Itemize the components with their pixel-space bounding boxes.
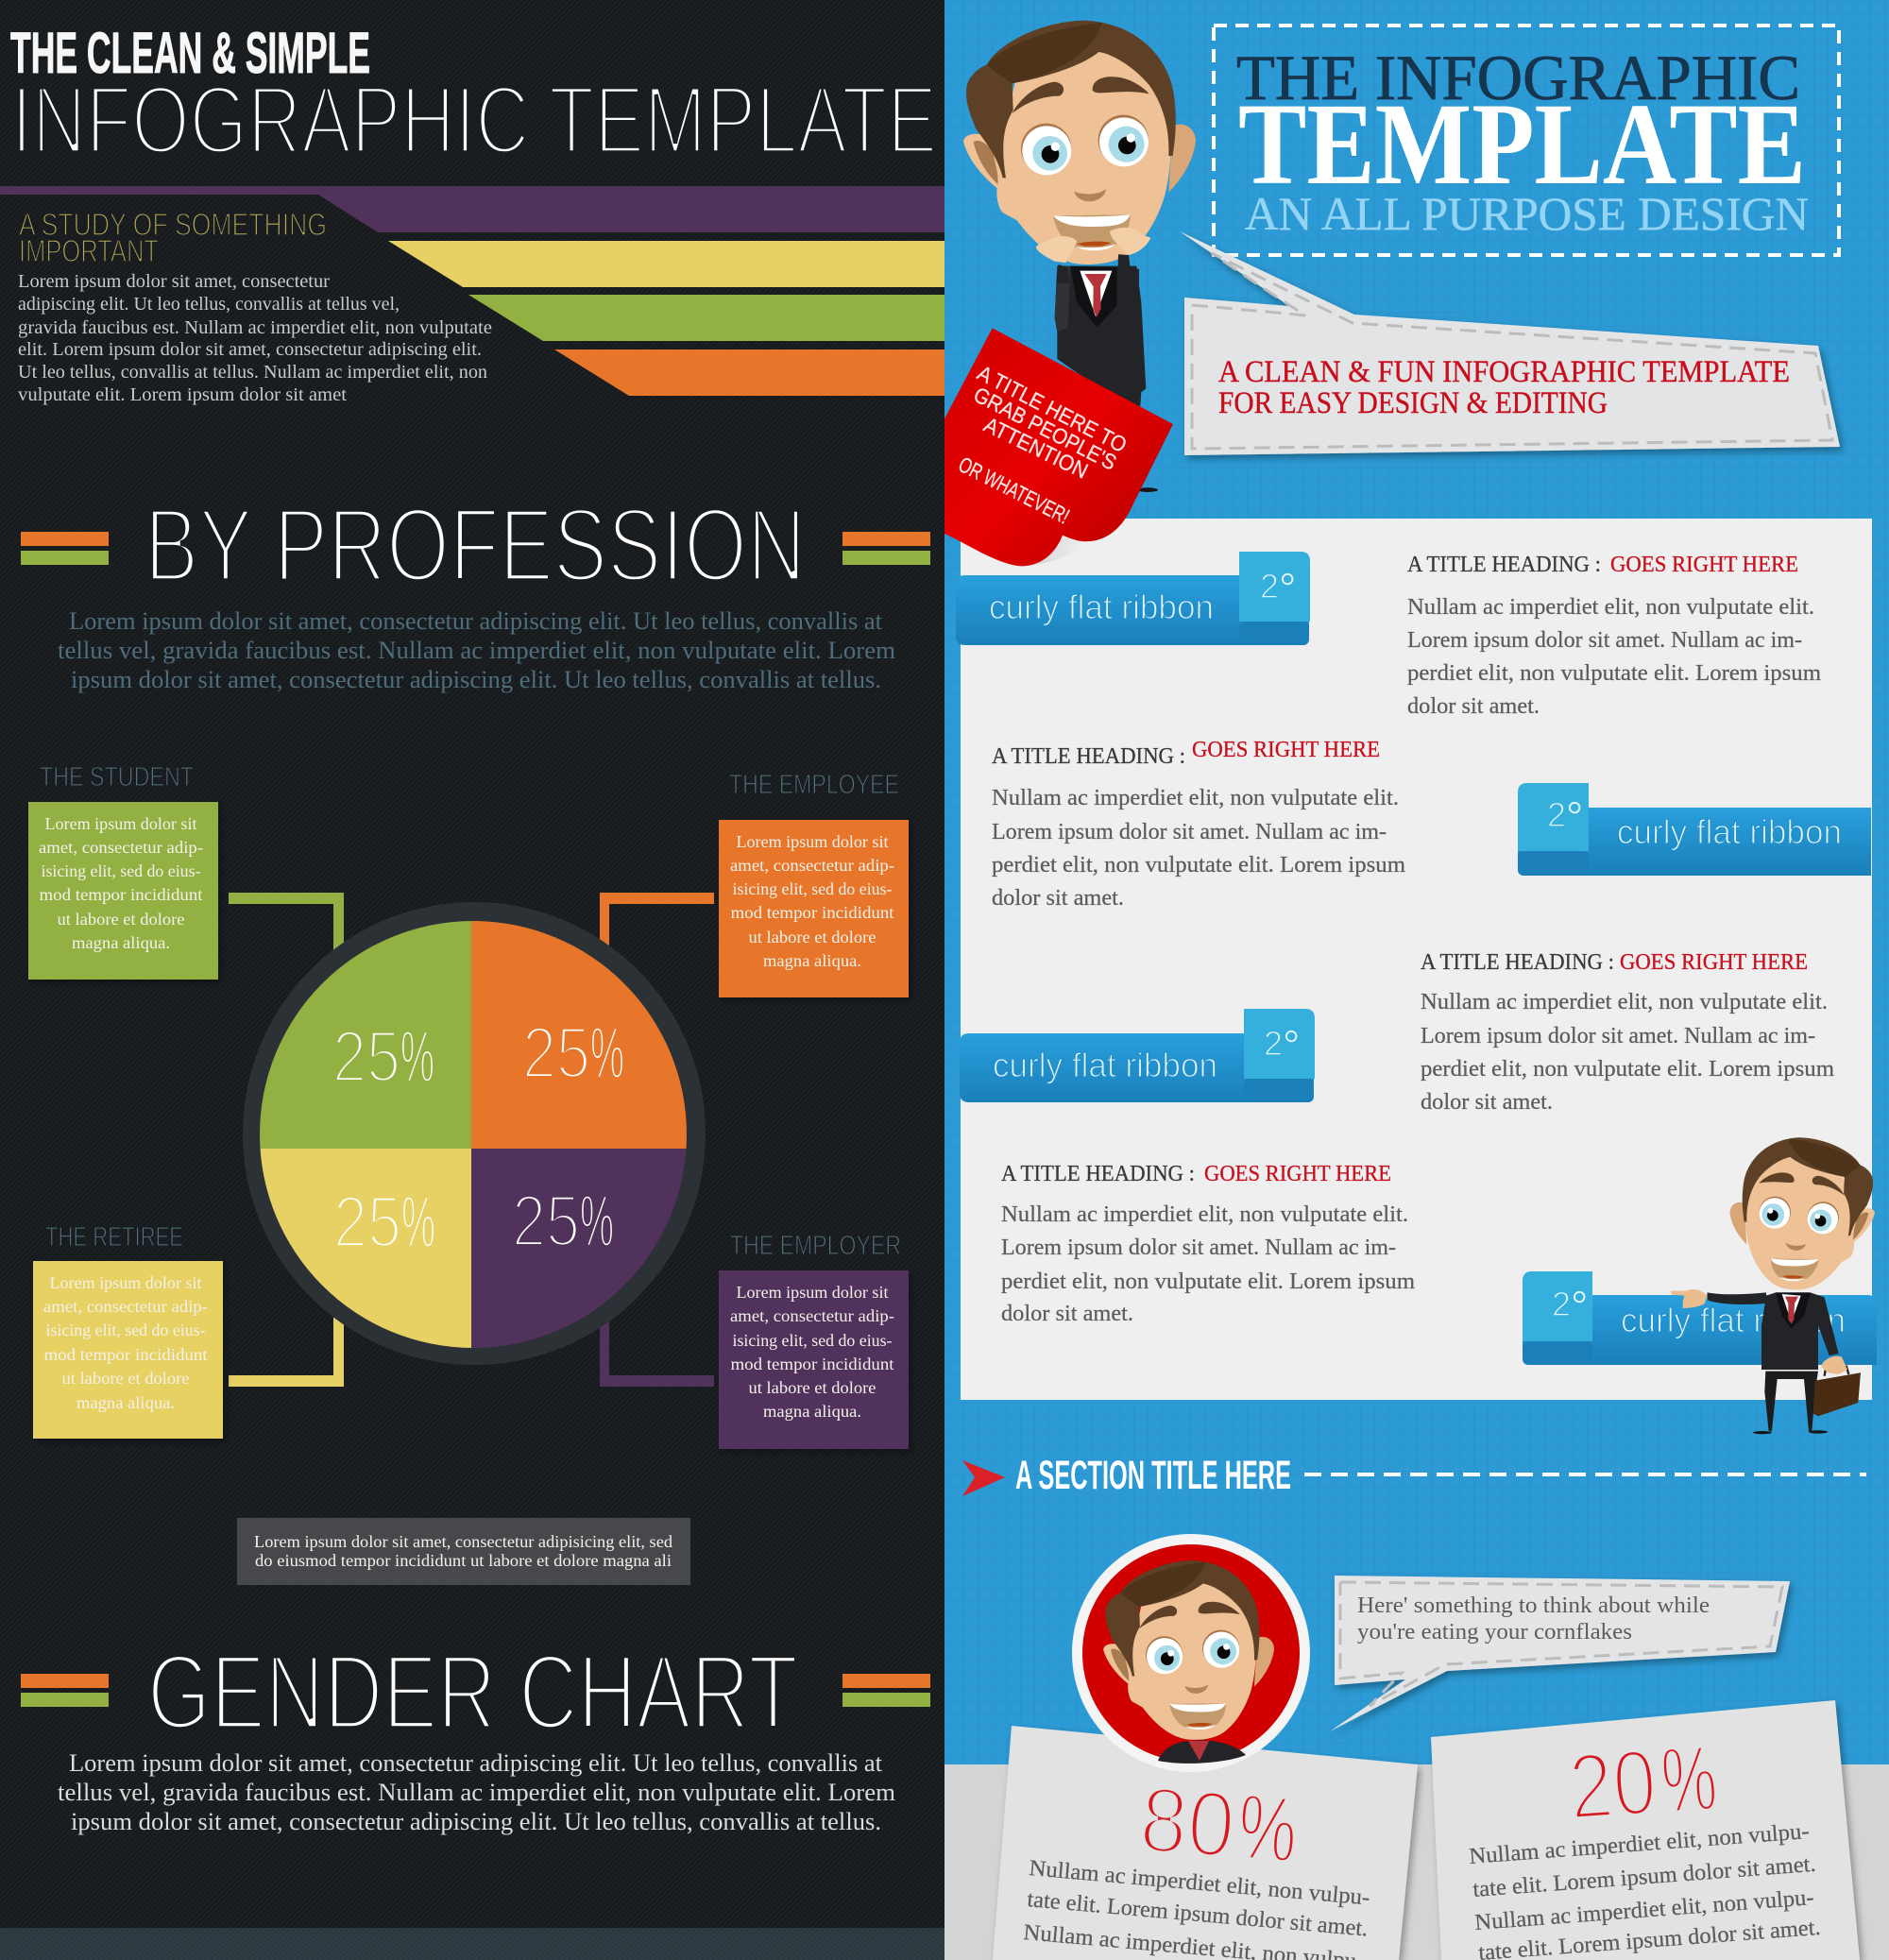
speech bubble: cornflakes: Here' something to think about while <box>1357 1594 1710 1618</box>
paper card: 20 percent: % <box>1659 1725 1720 1832</box>
card: the employer: mod tempor incididunt <box>731 1355 893 1373</box>
study text block: elit. Lorem ipsum dolor sit amet, consectetur adipiscing elit. <box>18 339 482 360</box>
study text block: Ut leo tellus, convallis at tellus. Nullam ac imperdiet elit, non <box>18 362 487 383</box>
ribbon 4: curly flat ribbon <box>1621 1301 1846 1339</box>
text block 2 <box>992 738 1405 911</box>
text block 1: Nullam ac imperdiet elit, non vulputate elit. <box>1407 595 1814 620</box>
text block 3: Lorem ipsum dolor sit amet. Nullam ac im- <box>1421 1024 1815 1048</box>
heading: gender chart: GENDER CHART <box>147 1633 798 1751</box>
text block 1: GOES RIGHT HERE <box>1610 553 1798 577</box>
paper card: 20 percent: Nullam ac imperdiet elit, non vulpu- <box>1474 1885 1814 1935</box>
card: the employer: ut labore et dolore <box>748 1378 876 1397</box>
card: the employee: amet, consectetur adip- <box>730 856 894 875</box>
gender paragraph <box>58 1749 895 1835</box>
gender paragraph: Lorem ipsum dolor sit amet, consectetur adipiscing elit. Ut leo tellus, convallis at <box>69 1749 883 1777</box>
header: infographic template box <box>1214 26 1839 255</box>
text block 4: perdiet elit, non vulputate elit. Lorem ipsum <box>1001 1270 1415 1294</box>
study text block: gravida faucibus est. Nullam ac imperdiet elit, non vulputate <box>18 317 492 338</box>
text block 1: A TITLE HEADING : <box>1407 553 1601 577</box>
pie chart: % <box>580 1181 614 1262</box>
panel: white content card <box>961 519 1872 1400</box>
card: the student: mod tempor incididunt <box>40 885 202 904</box>
card: the retiree: isicing elit, sed do eius- <box>45 1321 206 1339</box>
pie chart: 25 <box>522 1013 590 1094</box>
header: infographic template box: AN ALL PURPOSE DESIGN <box>1245 187 1809 240</box>
card: the retiree: THE RETIREE <box>45 1222 183 1253</box>
pie chart: 25 <box>512 1181 580 1262</box>
card: the student: Lorem ipsum dolor sit <box>45 814 196 833</box>
header: infographic template box: THE INFOGRAPHIC <box>1236 42 1800 113</box>
paper card: 80 percent <box>993 1726 1418 1960</box>
paper card: 80 percent: 80 <box>1136 1766 1238 1877</box>
callout: grey note: do eiusmod tempor incididunt ut labore et dolore magna ali <box>255 1551 672 1570</box>
bottom strip <box>0 1928 944 1960</box>
text block 3 <box>1421 950 1834 1115</box>
ribbon 4: 2 <box>1552 1285 1571 1323</box>
text block 4: Nullam ac imperdiet elit, non vulputate elit. <box>1001 1202 1408 1227</box>
ribbon 2: curly flat ribbon <box>1617 812 1842 851</box>
text block 2: A TITLE HEADING : <box>992 744 1185 769</box>
speech bubble: main <box>1180 231 1840 455</box>
pie chart: % <box>400 1016 434 1098</box>
character: pointing businessman <box>1670 1137 1875 1434</box>
text block 4 <box>1001 1162 1415 1326</box>
card: the student: amet, consectetur adip- <box>39 838 203 857</box>
text block 1: perdiet elit, non vulputate elit. Lorem ipsum <box>1407 661 1821 686</box>
ribbon 4 <box>1523 1271 1877 1365</box>
text block 3: GOES RIGHT HERE <box>1620 950 1808 975</box>
speech bubble: main: FOR EASY DESIGN & EDITING <box>1218 386 1608 420</box>
card: the employer: THE EMPLOYER <box>730 1231 901 1261</box>
panel: blue right background <box>944 0 1889 1960</box>
callout: grey note <box>237 1518 690 1585</box>
text block 2: dolor sit amet. <box>992 886 1124 911</box>
card: the employer: isicing elit, sed do eius- <box>733 1331 892 1350</box>
profession paragraph <box>58 607 895 693</box>
text block 4: A TITLE HEADING : <box>1001 1162 1195 1186</box>
ribbon 2: ° <box>1566 793 1583 842</box>
paper card: 20 percent: Nullam ac imperdiet elit, non vulpu- <box>1469 1819 1810 1869</box>
gender paragraph: ipsum dolor sit amet, consectetur adipiscing elit. Ut leo tellus, convallis at tellus. <box>71 1808 881 1835</box>
header: infographic template box: TEMPLATE <box>1238 79 1806 209</box>
character: businessman body <box>1055 266 1158 492</box>
profession paragraph: tellus vel, gravida faucibus est. Nullam ac imperdiet elit, non vulputate elit. Lorem <box>58 637 895 664</box>
card: the employer: Lorem ipsum dolor sit <box>737 1283 888 1302</box>
gender paragraph: tellus vel, gravida faucibus est. Nullam ac imperdiet elit, non vulputate elit. Lorem <box>58 1779 895 1806</box>
speech bubble: cornflakes <box>1330 1576 1790 1731</box>
study text block <box>18 207 492 405</box>
title: the clean and simple: THE CLEAN & SIMPLE <box>10 21 370 85</box>
profession paragraph: Lorem ipsum dolor sit amet, consectetur adipiscing elit. Ut leo tellus, convallis at <box>69 607 883 635</box>
card: the student: isicing elit, sed do eius- <box>42 861 200 880</box>
paper card: 20 percent: tate elit. Lorem ipsum dolor sit amet. <box>1472 1852 1816 1902</box>
ribbon 4: ° <box>1571 1282 1588 1331</box>
paper card: 20 percent <box>1431 1700 1860 1960</box>
pie chart: % <box>590 1013 624 1094</box>
ribbon 3: curly flat ribbon <box>993 1046 1217 1084</box>
sticker: red title note <box>944 328 1173 566</box>
ribbon 3 <box>960 1009 1315 1102</box>
text block 3: A TITLE HEADING : <box>1421 950 1614 975</box>
character: businessman head <box>963 21 1196 283</box>
text block 2: Lorem ipsum dolor sit amet. Nullam ac im- <box>992 820 1387 844</box>
callout: grey note: Lorem ipsum dolor sit amet, consectetur adipisicing elit, sed <box>254 1532 672 1551</box>
text block 3: perdiet elit, non vulputate elit. Lorem ipsum <box>1421 1057 1834 1082</box>
speech bubble: main: A CLEAN & FUN INFOGRAPHIC TEMPLATE <box>1218 355 1790 389</box>
text block 3: Nullam ac imperdiet elit, non vulputate elit. <box>1421 990 1828 1014</box>
portrait: character in red circle <box>1072 1534 1310 1772</box>
text block 4: Lorem ipsum dolor sit amet. Nullam ac im- <box>1001 1236 1396 1260</box>
sticker: red title note: GRAB PEOPLE'S <box>970 382 1120 475</box>
card: the retiree: Lorem ipsum dolor sit <box>49 1273 202 1292</box>
grey bottom band <box>944 1764 1889 1960</box>
section title with arrow: A SECTION TITLE HERE <box>1015 1453 1291 1498</box>
card: the retiree <box>33 1222 223 1439</box>
pie chart <box>243 902 706 1365</box>
study text block: vulputate elit. Lorem ipsum dolor sit amet <box>18 384 347 405</box>
pie chart: 25 <box>332 1016 400 1098</box>
profession paragraph: ipsum dolor sit amet, consectetur adipiscing elit. Ut leo tellus, convallis at tellus. <box>71 666 881 693</box>
sticker: red title note: ATTENTION <box>980 412 1092 484</box>
paper card: 20 percent: 20 <box>1566 1730 1659 1839</box>
section title with arrow <box>962 1453 1866 1498</box>
text block 4: dolor sit amet. <box>1001 1302 1133 1326</box>
card: the employee: mod tempor incididunt <box>731 903 893 922</box>
card: the employee: magna aliqua. <box>763 951 861 970</box>
text block 3: dolor sit amet. <box>1421 1090 1553 1115</box>
card: the employee: isicing elit, sed do eius- <box>733 879 892 898</box>
card: the employee: THE EMPLOYEE <box>729 770 899 800</box>
connectors to pie <box>229 893 714 1387</box>
card: the retiree: ut labore et dolore <box>62 1369 190 1388</box>
study text block: Lorem ipsum dolor sit amet, consectetur <box>18 271 330 292</box>
text block 2: GOES RIGHT HERE <box>1192 738 1380 762</box>
panel: dark left background <box>0 0 944 1960</box>
card: the employer: amet, consectetur adip- <box>730 1306 894 1325</box>
ribbon 1 <box>956 552 1310 645</box>
card: the employee <box>719 770 909 997</box>
sticker: red title note: OR WHATEVER! <box>955 452 1074 529</box>
text block 2: perdiet elit, non vulputate elit. Lorem ipsum <box>992 853 1405 878</box>
pie chart: % <box>401 1182 435 1263</box>
speech bubble: cornflakes: you're eating your cornflakes <box>1357 1620 1632 1645</box>
ribbon 1: 2 <box>1260 567 1279 605</box>
card: the employee: ut labore et dolore <box>748 928 876 946</box>
text block 2: Nullam ac imperdiet elit, non vulputate elit. <box>992 786 1399 810</box>
card: the student: ut labore et dolore <box>57 910 185 929</box>
ribbon 2 <box>1518 783 1871 876</box>
study text block: IMPORTANT <box>19 233 159 268</box>
card: the student: THE STUDENT <box>40 762 194 793</box>
card: the retiree: amet, consectetur adip- <box>43 1297 208 1316</box>
card: the employer: magna aliqua. <box>763 1402 861 1421</box>
card: the employee: Lorem ipsum dolor sit <box>737 832 888 851</box>
ribbon 1: ° <box>1279 564 1296 613</box>
card: the retiree: mod tempor incididunt <box>43 1345 208 1364</box>
card: the student <box>28 762 218 980</box>
card: the student: magna aliqua. <box>72 933 170 952</box>
card: the retiree: magna aliqua. <box>77 1393 175 1412</box>
text block 1: dolor sit amet. <box>1407 694 1540 719</box>
decorative colour stripes <box>0 186 944 396</box>
paper card: 80 percent: Nullam ac imperdiet elit, non vulpu- <box>1028 1856 1370 1911</box>
ribbon 3: 2 <box>1264 1024 1283 1063</box>
paper card: 80 percent: tate elit. Lorem ipsum dolor sit amet. <box>1026 1887 1369 1942</box>
card: the employer <box>719 1231 909 1449</box>
text block 1: Lorem ipsum dolor sit amet. Nullam ac im- <box>1407 628 1802 653</box>
title: infographic template: INFOGRAPHIC TEMPLATE <box>11 66 937 174</box>
heading: by profession: BY PROFESSION <box>145 487 806 604</box>
pie chart: 25 <box>333 1182 401 1263</box>
text block 1 <box>1407 553 1821 719</box>
text block 4: GOES RIGHT HERE <box>1204 1162 1391 1186</box>
ribbon 1: curly flat ribbon <box>989 588 1214 626</box>
paper card: 80 percent: % <box>1234 1774 1301 1882</box>
study text block: A STUDY OF SOMETHING <box>19 207 327 242</box>
sticker: red title note: A TITLE HERE TO <box>974 360 1131 457</box>
study text block: adipiscing elit. Ut leo tellus, convallis at tellus vel, <box>18 294 400 315</box>
ribbon 2: 2 <box>1547 795 1566 834</box>
ribbon 3: ° <box>1283 1021 1300 1070</box>
